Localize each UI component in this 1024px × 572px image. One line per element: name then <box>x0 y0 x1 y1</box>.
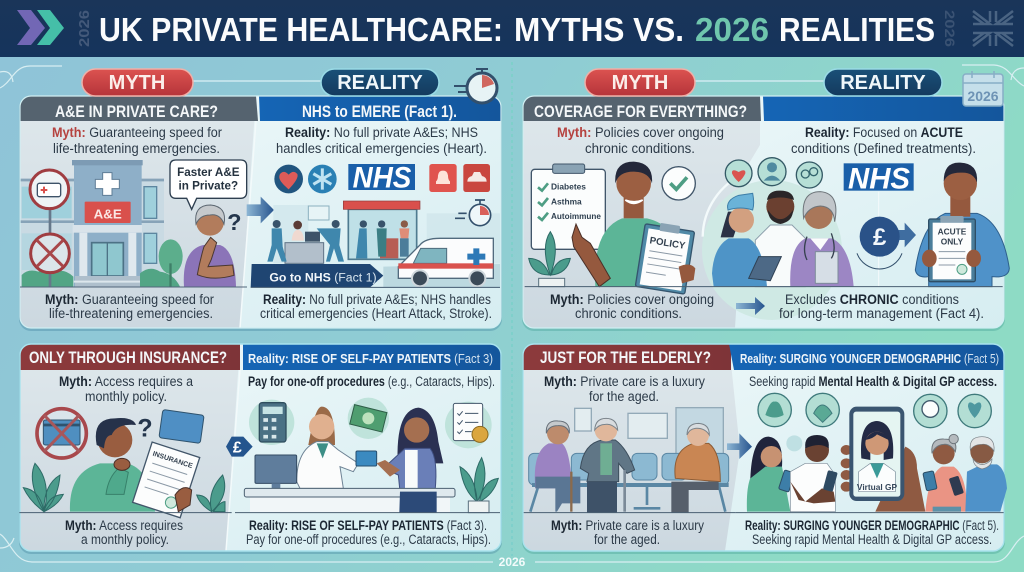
badge: myth right: MYTH <box>612 72 668 94</box>
reality text top: Pay for one-off procedures (e.g., Cataracts, Hips). <box>248 374 495 389</box>
illustration: policy holder: Diabetes <box>551 182 586 192</box>
illustration: clinical team: NHS <box>848 162 910 195</box>
illustration: hospital and patient: Faster A&E <box>177 166 240 179</box>
reality heading: NHS to EMERE (Fact 1). <box>302 102 457 121</box>
illustration: policy holder: POLICY <box>649 235 687 252</box>
arrow <box>736 297 765 315</box>
badge: reality right <box>824 69 942 96</box>
year label right: 2026 <box>942 10 958 47</box>
reality heading: Reality: SURGING YOUNGER DEMOGRAPHIC (Fact 5) <box>740 351 999 366</box>
icon: union flag <box>973 11 1013 46</box>
myth heading: COVERAGE FOR EVERYTHING? <box>534 102 747 121</box>
illustration: younger digital users <box>735 393 1007 513</box>
myth text top: monthly policy. <box>85 389 167 404</box>
illustration: clinical team: ONLY <box>941 237 964 247</box>
reality text top: Reality: Focused on ACUTE <box>805 125 963 140</box>
reality text bottom: Reality: No full private A&Es; NHS handles <box>263 292 491 307</box>
illustration: hospital and patient: A&E <box>94 206 122 221</box>
title: UK PRIVATE HEALTHCARE: <box>99 11 503 48</box>
year label left: 2026 <box>76 10 93 47</box>
illustration: self-pay reception <box>235 398 500 513</box>
myth text bottom: for the aged. <box>594 532 660 547</box>
illustration: NHS response: NHS <box>353 161 412 194</box>
illustration: clinical team: ACUTE <box>938 227 967 237</box>
reality text top <box>276 125 487 156</box>
reality text bottom: for long-term management (Fact 4). <box>779 306 984 321</box>
reality text top: Reality: No full private A&Es; NHS <box>285 125 478 140</box>
badge: myth right <box>585 69 695 96</box>
myth text bottom <box>45 292 214 321</box>
reality text bottom: Excludes CHRONIC conditions <box>785 292 959 307</box>
title <box>99 11 935 48</box>
illustration: clinical team <box>525 158 1009 287</box>
illustration: elderly waiting room <box>524 408 752 513</box>
myth text bottom <box>65 518 183 547</box>
myth text bottom: Myth: Policies cover ongoing <box>550 292 714 307</box>
myth text bottom: a monthly policy. <box>81 532 169 547</box>
illustration: NHS response: Go to NHS (Fact 1). <box>269 271 380 285</box>
illustration: hospital and patient: in Private? <box>179 179 238 192</box>
myth text bottom: life-threatening emergencies. <box>49 306 213 321</box>
icon: calendar 2026: 2026 <box>967 88 999 104</box>
illustration: hospital and patient: ? <box>227 209 241 235</box>
myth text top: chronic conditions. <box>585 141 695 156</box>
myth text bottom: chronic conditions. <box>575 306 682 321</box>
footer year: 2026 <box>499 555 526 569</box>
reality text top <box>791 125 976 156</box>
title: 2026 <box>695 11 769 48</box>
reality text bottom: Reality: RISE OF SELF-PAY PATIENTS (Fact 3). <box>249 518 487 533</box>
icon: chevrons <box>17 10 64 45</box>
illustration: clinical team: £ <box>873 224 887 251</box>
myth text bottom <box>550 292 714 321</box>
panel: coverage for everything <box>522 96 1009 331</box>
myth text bottom: Myth: Private care is a luxury <box>551 518 704 533</box>
myth text bottom: Myth: Guaranteeing speed for <box>45 292 214 307</box>
illustration: confused patient <box>19 409 253 518</box>
badge: reality left: REALITY <box>337 72 423 94</box>
myth heading: JUST FOR THE ELDERLY? <box>540 348 711 367</box>
illustration: policy holder: Autoimmune <box>551 211 601 221</box>
illustration: confused patient: INSURANCE <box>152 451 194 470</box>
badge: reality right: REALITY <box>840 72 926 94</box>
title: MYTHS VS. <box>514 11 684 48</box>
badge: myth left: MYTH <box>109 72 165 94</box>
icon: stopwatch <box>454 69 497 103</box>
panel: just for the elderly <box>522 344 1007 554</box>
panel: A&E in private care <box>19 96 502 331</box>
myth text bottom <box>551 518 704 547</box>
illustration: policy holder: Asthma <box>551 196 582 206</box>
myth text top: Myth: Guaranteeing speed for <box>52 125 222 140</box>
reality text bottom: critical emergencies (Heart Attack, Stroke). <box>260 306 492 321</box>
reality text top: handles critical emergencies (Heart). <box>276 141 487 156</box>
reality heading: Reality: RISE OF SELF-PAY PATIENTS (Fact 3) <box>248 351 493 366</box>
illustration: younger digital users: Virtual GP <box>857 482 897 492</box>
myth heading: A&E IN PRIVATE CARE? <box>55 102 218 121</box>
reality text bottom <box>745 518 999 547</box>
reality text bottom: Pay for one-off procedures (e.g., Cataracts, Hips). <box>246 532 491 547</box>
illustration: confused patient: £ <box>233 439 242 456</box>
myth text top: Myth: Private care is a luxury <box>544 374 705 389</box>
reality text bottom <box>260 292 492 321</box>
myth text top: life-threatening emergencies. <box>53 141 220 156</box>
panel: only through insurance <box>19 344 502 554</box>
header bar <box>0 0 1024 57</box>
myth text top <box>557 125 724 156</box>
myth text top: for the aged. <box>589 389 659 404</box>
myth text top <box>544 374 705 404</box>
myth text top <box>52 125 222 156</box>
reality text top: conditions (Defined treatments). <box>791 141 976 156</box>
badge: reality left <box>321 69 439 96</box>
myth text top <box>59 374 193 404</box>
myth text bottom: Myth: Access requires <box>65 518 183 533</box>
badge: myth left <box>82 69 193 96</box>
myth text top: Myth: Access requires a <box>59 374 193 389</box>
illustration: confused patient: ? <box>137 415 153 443</box>
reality text bottom <box>246 518 491 547</box>
illustration: hospital and patient <box>21 160 274 287</box>
illustration: NHS response <box>251 161 500 287</box>
myth text top: Myth: Policies cover ongoing <box>557 125 724 140</box>
icon: calendar 2026 <box>963 71 1003 106</box>
illustration: policy holder <box>529 162 695 294</box>
myth heading: ONLY THROUGH INSURANCE? <box>29 348 227 367</box>
title: REALITIES <box>779 11 935 48</box>
reality text bottom <box>779 292 984 321</box>
